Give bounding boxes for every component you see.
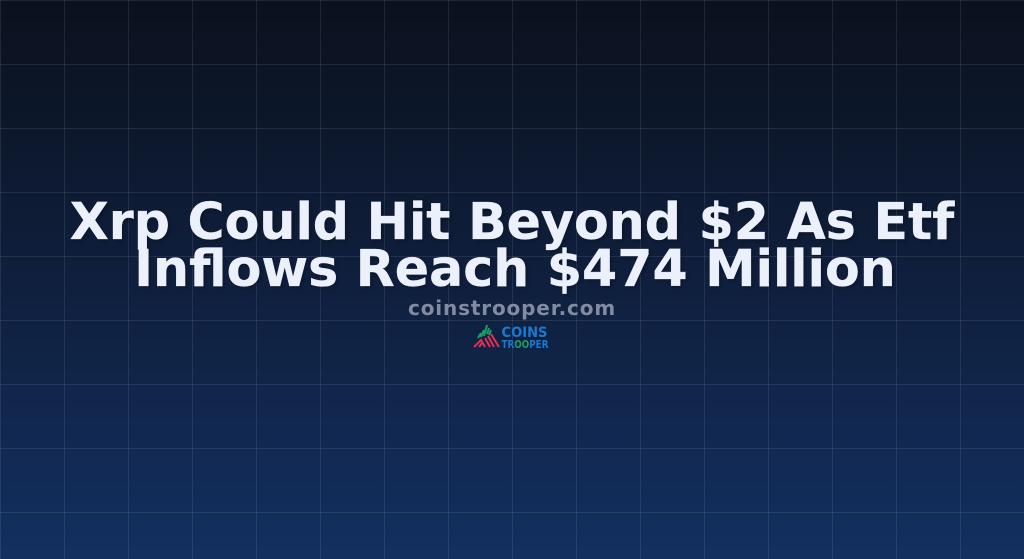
title: Inflows Reach $474 Million	[134, 239, 896, 298]
logo: Coins Trooper: COINS	[502, 325, 548, 341]
title	[70, 192, 956, 298]
website text: coinstrooper.com	[408, 296, 616, 320]
title: Xrp Could Hit Beyond $2 As Etf	[70, 192, 954, 250]
logo: Coins Trooper	[473, 324, 548, 350]
